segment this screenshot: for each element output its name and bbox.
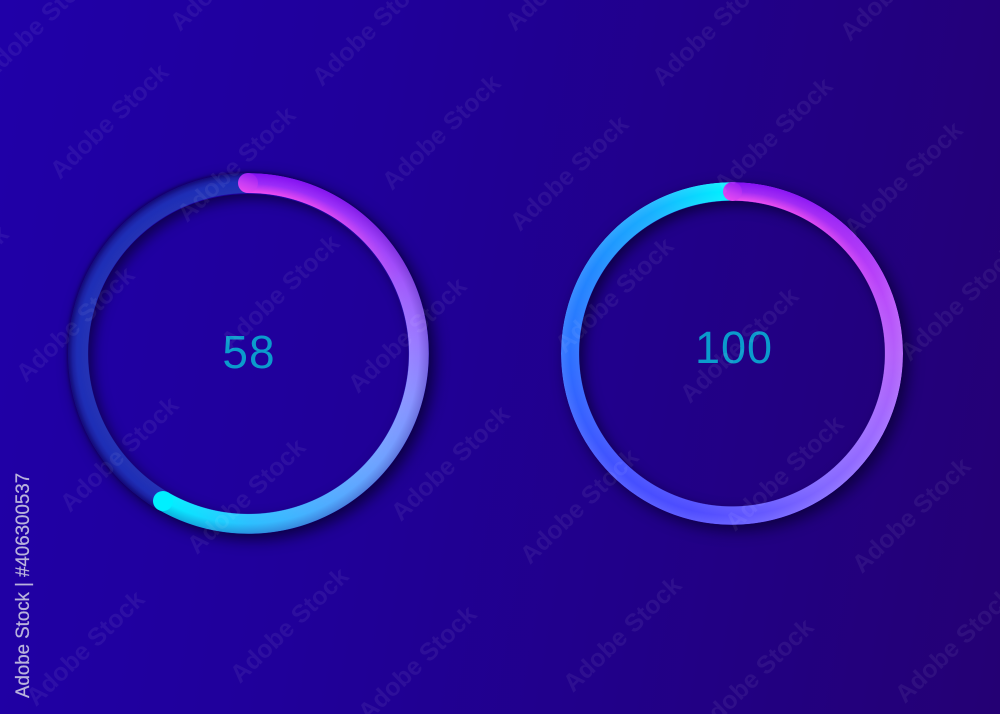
unfilled track — [68, 173, 428, 534]
inner hole shadow — [88, 194, 408, 514]
repeated watermark pattern: Adobe Stock — [720, 410, 849, 536]
inner hole shadow — [579, 200, 885, 506]
full progress arc — [561, 182, 903, 525]
repeated watermark pattern: Adobe Stock — [550, 232, 679, 358]
repeated watermark pattern: Adobe Stock — [55, 391, 184, 517]
repeated watermark pattern: Adobe Stock — [505, 110, 634, 236]
value 58: 58 — [222, 326, 276, 378]
magenta highlight on arc start — [733, 182, 885, 283]
repeated watermark pattern: Adobe Stock — [216, 229, 345, 355]
repeated watermark pattern: Adobe Stock — [182, 433, 311, 559]
repeated watermark pattern: Adobe Stock — [45, 58, 174, 184]
repeated watermark pattern: Adobe Stock — [377, 69, 506, 195]
repeated watermark pattern: Adobe Stock — [675, 282, 804, 408]
vertical stock id: Adobe Stock | #406300537 — [13, 473, 34, 698]
value 100: 100 — [695, 322, 773, 373]
repeated watermark pattern: Adobe Stock — [11, 261, 140, 387]
ring outer shadow — [68, 173, 428, 534]
repeated watermark pattern: Adobe Stock — [839, 116, 968, 242]
repeated watermark pattern: Adobe Stock — [172, 101, 301, 227]
gauge: 100 percent — [556, 178, 916, 538]
arc radial shading — [160, 174, 429, 534]
start cap — [723, 182, 742, 201]
repeated watermark pattern: Adobe Stock — [847, 452, 976, 578]
repeated watermark pattern: Adobe Stock — [225, 562, 354, 688]
magenta highlight on arc start — [248, 173, 398, 272]
start cap — [238, 173, 258, 193]
repeated watermark pattern: Adobe Stock — [386, 400, 515, 526]
repeated watermark pattern: Adobe Stock — [558, 571, 687, 697]
repeated watermark pattern: Adobe Stock — [343, 272, 472, 398]
ring outer shadow — [561, 182, 903, 525]
gauge: 58 percent — [63, 168, 444, 549]
repeated watermark pattern: Adobe Stock — [21, 585, 150, 711]
repeated watermark pattern: Adobe Stock — [709, 72, 838, 198]
end cap — [153, 491, 173, 511]
repeated watermark pattern: Adobe Stock — [515, 443, 644, 569]
arc radial shading — [561, 182, 903, 525]
progress arc: 58 filled — [159, 173, 429, 534]
